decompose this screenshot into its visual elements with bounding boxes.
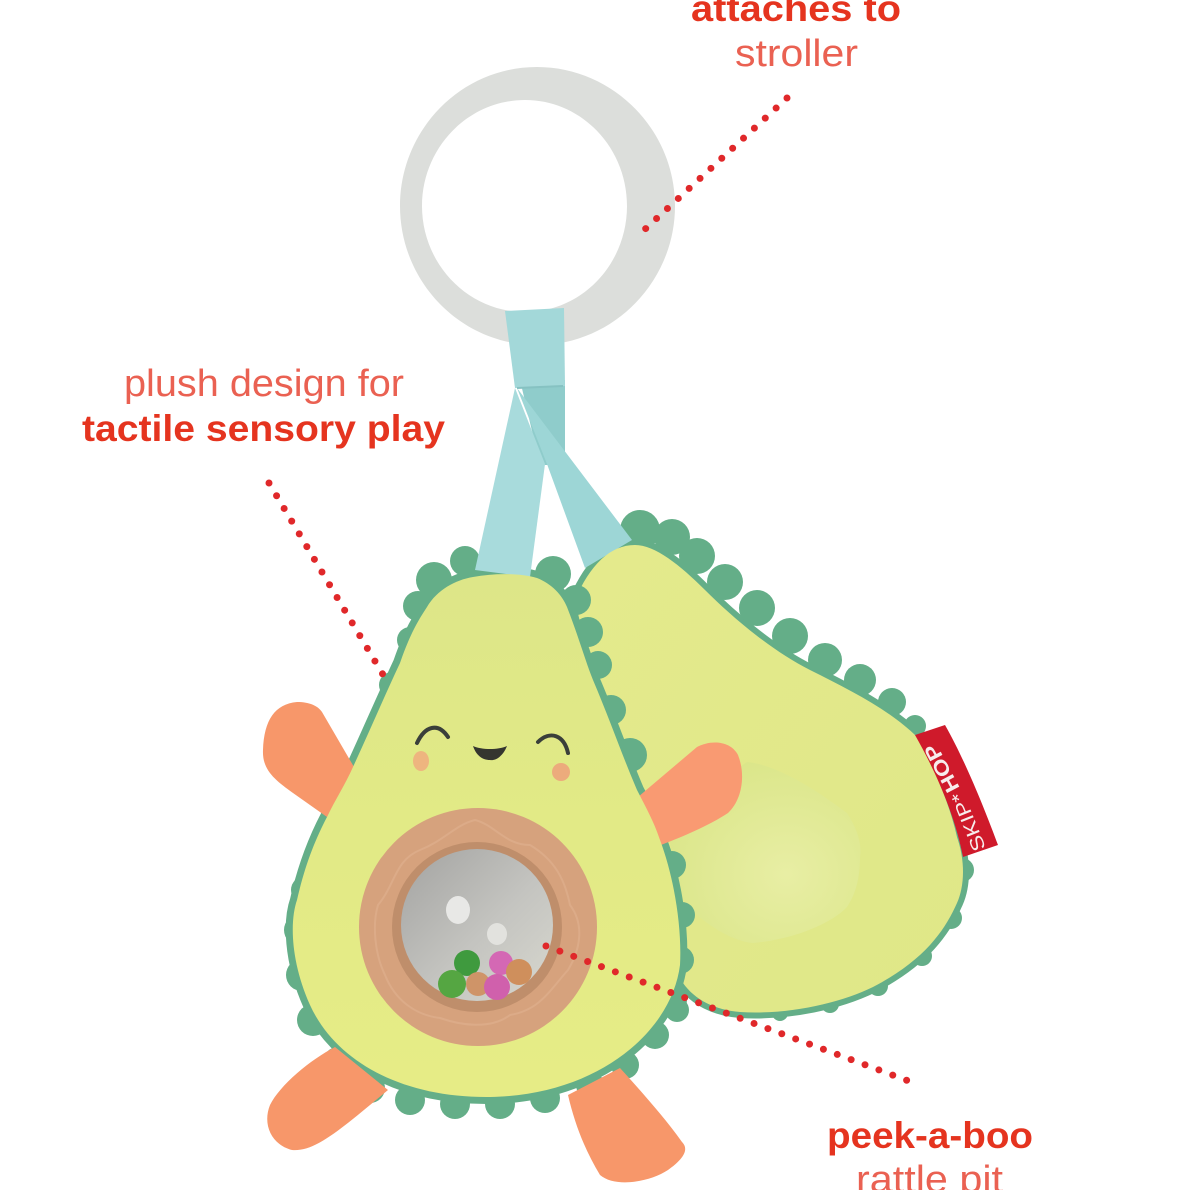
- callout: peek-a-boo rattle pit: [827, 1115, 1033, 1190]
- skip hop tag: SKIP*: [948, 788, 991, 854]
- rattle inner rim: [392, 842, 562, 1012]
- callout: plush design: [82, 363, 445, 449]
- rattle beads: [438, 950, 532, 1000]
- right arm: [638, 742, 742, 846]
- face: [413, 728, 570, 781]
- front ribbon strap: [475, 388, 545, 577]
- rattle dome: [401, 849, 553, 1001]
- dotted leader: stroller: [642, 98, 787, 232]
- skip hop tag: [915, 725, 998, 857]
- front green plush edge: [284, 546, 695, 1119]
- plastic ring: [400, 67, 675, 345]
- hanging back of ribbon: [520, 380, 565, 465]
- pit hollow: [665, 762, 860, 943]
- callout: plush design: plush design for: [124, 363, 404, 405]
- toy illustration: [263, 67, 998, 1182]
- rattle teether ring: [359, 808, 597, 1046]
- skip hop tag: HOP: [921, 740, 964, 796]
- dotted leader: rattle: [546, 946, 914, 1083]
- diagonal ribbon strap: [517, 388, 632, 568]
- callout: plush design: tactile sensory play: [82, 408, 445, 449]
- callout: attaches to stroller: [691, 0, 901, 75]
- callout: attaches to stroller: stroller: [735, 33, 858, 75]
- dotted leader: plush: [269, 483, 385, 678]
- ribbon loop over ring: [475, 308, 565, 577]
- callout: peek-a-boo rattle pit: peek-a-boo: [827, 1115, 1033, 1156]
- teether wavy emboss: [375, 820, 579, 1025]
- green plush back half: [575, 510, 974, 1022]
- bottom left foot: [267, 1047, 388, 1150]
- back half avocado flesh: [575, 545, 963, 1012]
- bottom right foot: [568, 1068, 685, 1182]
- front avocado flesh: [293, 574, 680, 1097]
- left arm: [263, 702, 354, 817]
